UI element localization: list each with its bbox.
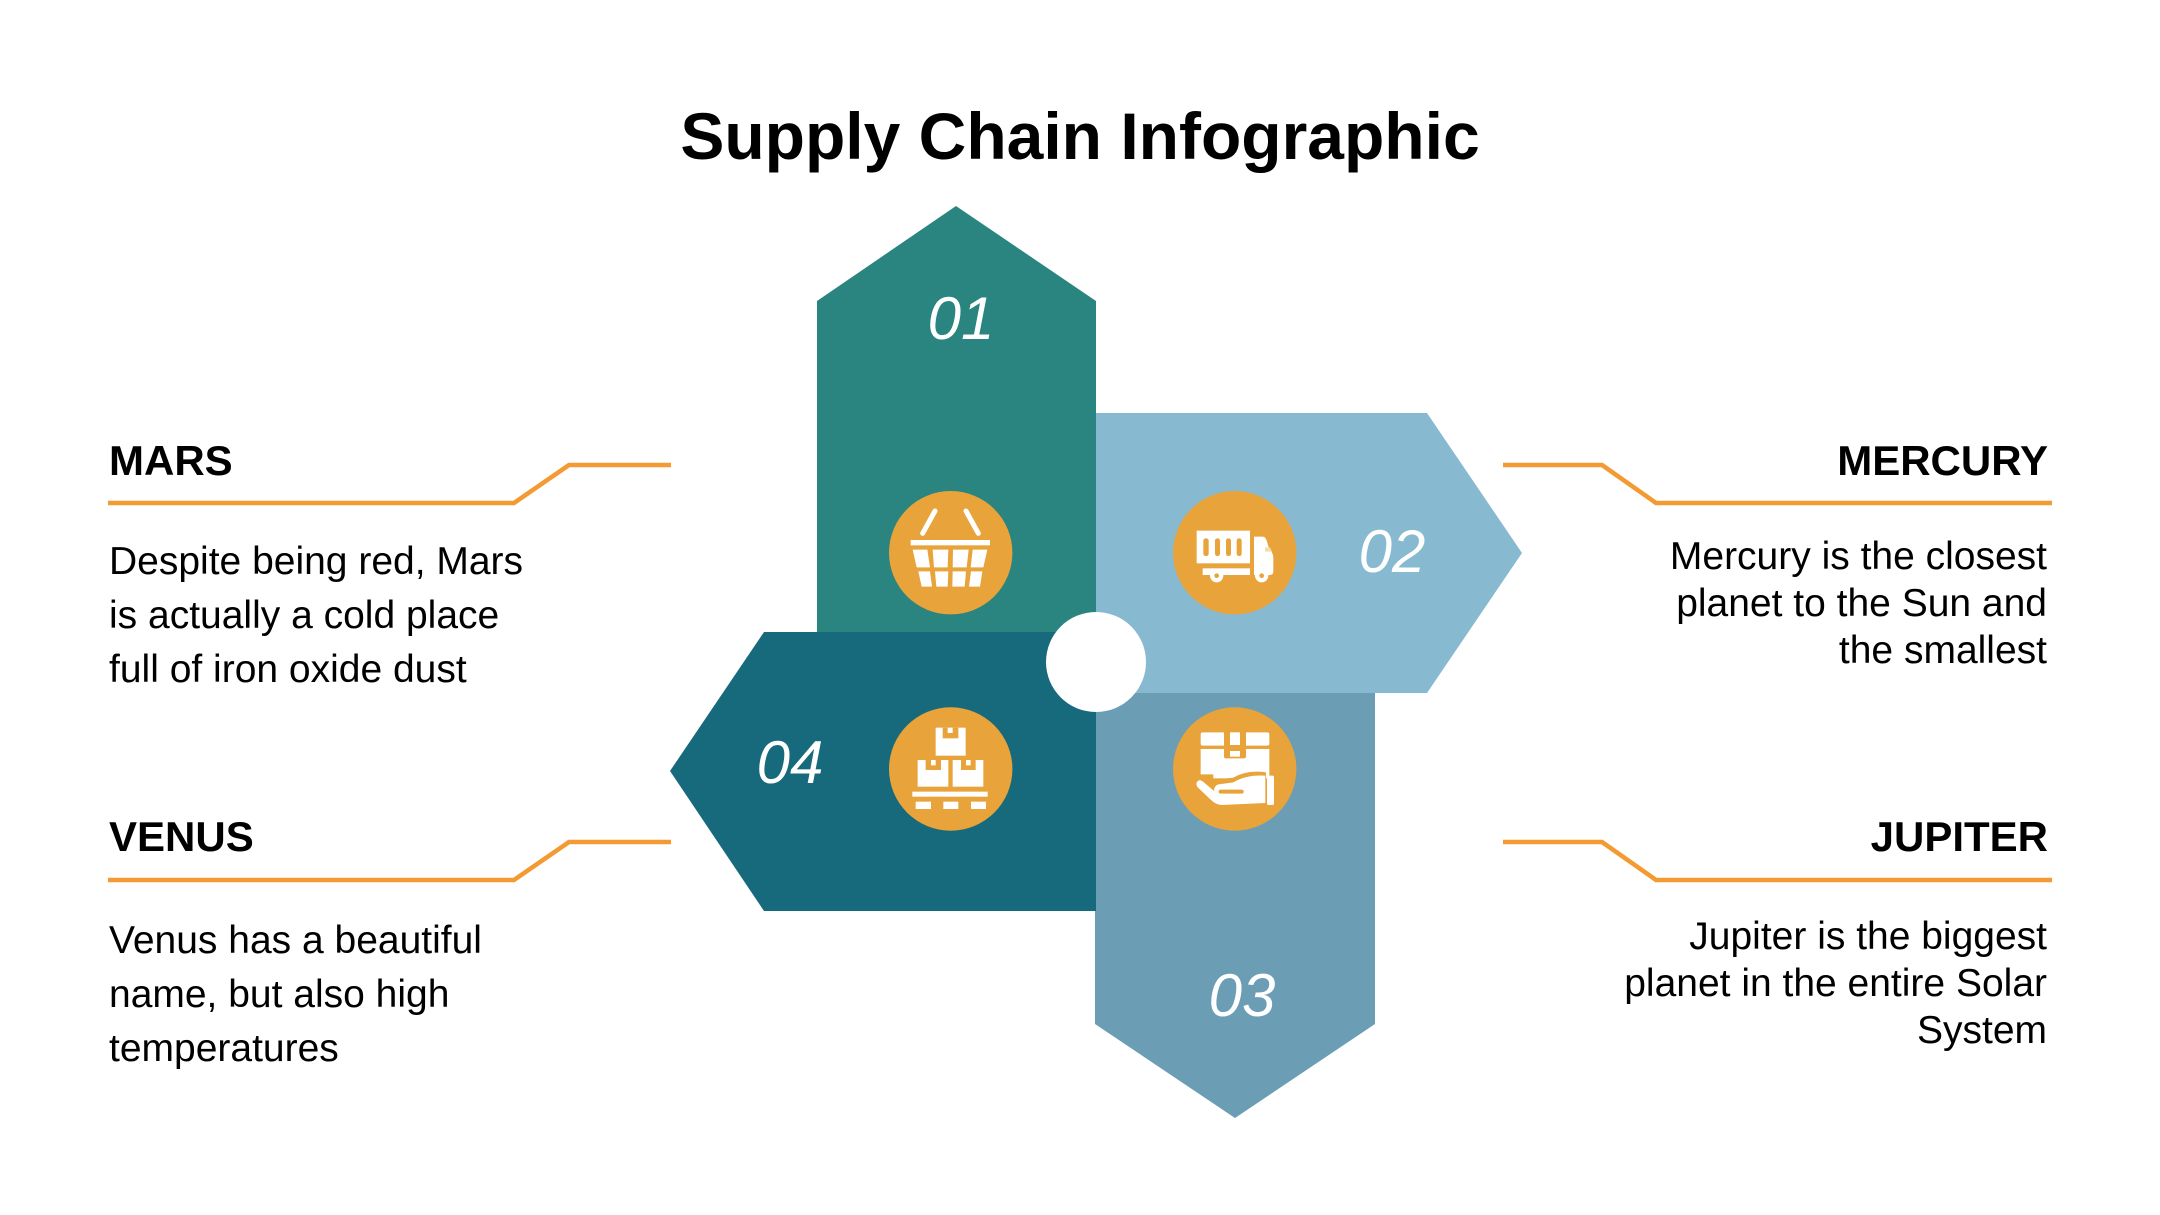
panel: Mercury [1503,437,2052,672]
arrow 04: dark teal, pointing left [670,632,1096,911]
panel: Venus: temperatures [109,1027,339,1070]
icon: shopping basket [889,491,1012,614]
icon: delivery truck [1173,491,1296,614]
panel: Mercury: the smallest [1839,629,2047,672]
panel: Mercury: MERCURY [1837,437,2048,484]
panel: Venus: name, but also high [109,973,449,1016]
centre white circle [1046,612,1146,712]
panel: Mercury: Mercury is the closest [1670,535,2047,578]
arrow 03: mid blue, pointing down: 03 [1209,962,1275,1029]
panel: Mars: MARS [109,437,233,484]
arrow 02: light blue, pointing right [1096,413,1522,693]
panel: Mars [108,437,671,691]
panel: Jupiter: JUPITER [1871,813,2048,860]
panel: Mercury: planet to the Sun and [1676,582,2047,625]
panel: Venus: Venus has a beautiful [109,919,482,962]
icon: hand holding box [1173,707,1296,831]
arrow 02: light blue, pointing right: 02 [1359,518,1425,585]
panel: Venus [108,813,671,1070]
panel: Mars: Despite being red, Mars [109,540,523,583]
panel: Jupiter: planet in the entire Solar [1624,962,2047,1005]
panel: Mars: full of iron oxide dust [109,648,467,691]
title: Supply Chain Infographic [680,99,1480,173]
icon: stacked boxes on pallet [889,707,1012,831]
arrow 04: dark teal, pointing left: 04 [757,729,823,796]
panel: Jupiter: System [1917,1009,2047,1052]
panel: Venus: VENUS [109,813,254,860]
panel: Jupiter [1503,813,2052,1052]
arrow 03: mid blue, pointing down [1095,690,1375,1118]
panel: Jupiter: Jupiter is the biggest [1689,915,2047,958]
arrow 01: green, pointing up: 01 [928,285,994,352]
arrow 01: green, pointing up [817,206,1096,640]
panel: Mars: is actually a cold place [109,594,499,637]
